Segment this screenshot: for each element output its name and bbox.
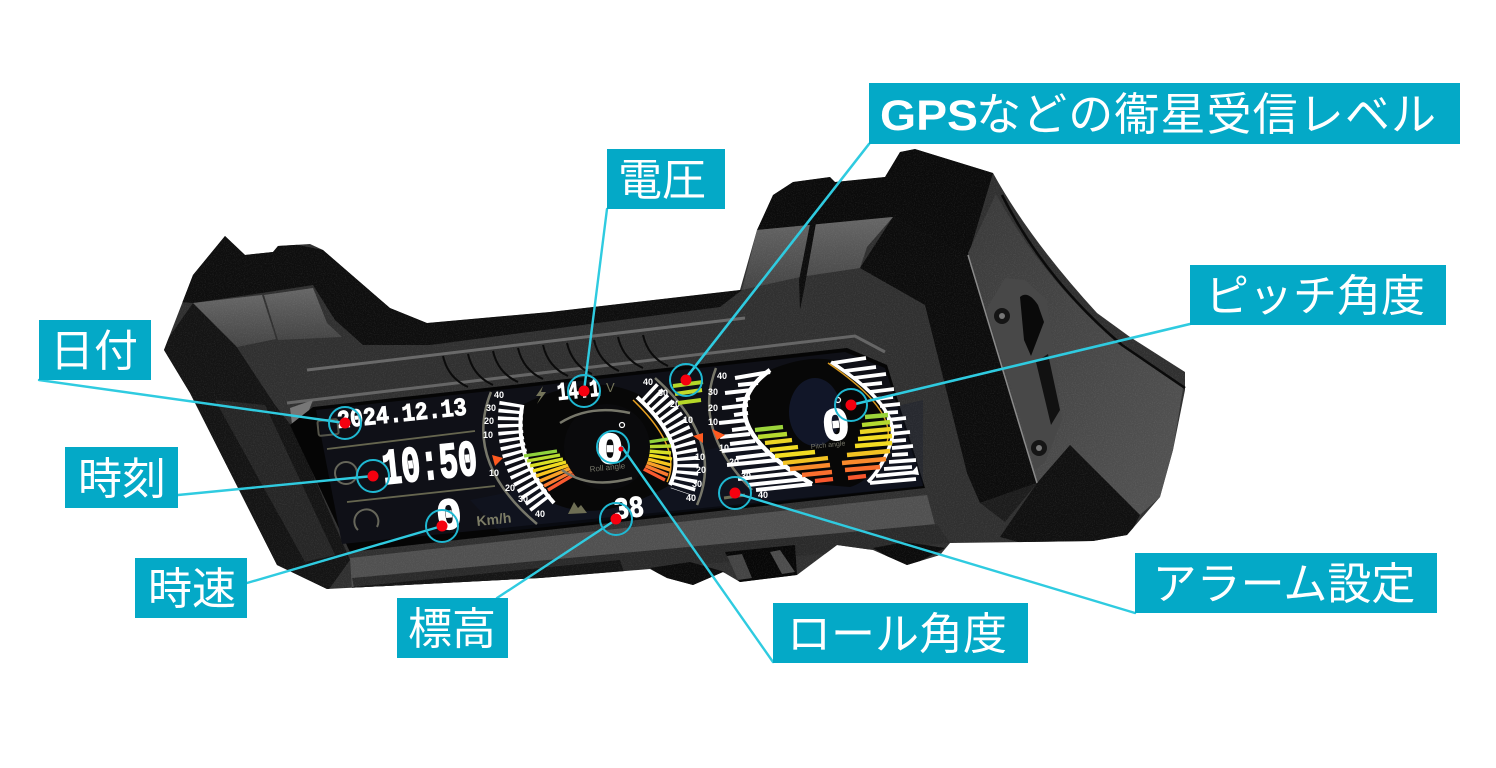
voltage readout: V xyxy=(606,380,615,395)
right scale numbers: 40 xyxy=(686,493,696,503)
left inner edge xyxy=(744,370,812,484)
speed: 0 xyxy=(434,492,464,544)
label: pitch angle: ピッチ角度 xyxy=(1205,272,1425,321)
voltage readout: 14.1 xyxy=(556,375,602,408)
left side face xyxy=(160,303,350,592)
marker: voltage xyxy=(568,375,600,407)
label: elevation xyxy=(397,598,508,658)
side panel xyxy=(968,194,1183,515)
left scale numbers xyxy=(708,371,768,500)
grain xyxy=(150,140,1200,600)
upper left grey panels xyxy=(193,295,276,347)
line: alarm xyxy=(735,493,1135,613)
ridge highlights xyxy=(307,318,745,370)
left scale numbers: 40 xyxy=(535,509,545,519)
chart: pitch gauge xyxy=(708,358,919,500)
roll value: 0 xyxy=(597,427,623,477)
chart: roll gauge xyxy=(483,377,706,524)
voltage readout xyxy=(536,375,615,408)
label: voltage xyxy=(607,149,725,209)
marker: elevation xyxy=(600,503,632,535)
marker: GPS xyxy=(670,364,702,396)
panel: date time speed xyxy=(317,394,512,544)
label: GPS satellite level: GPS xyxy=(880,92,978,140)
elevation readout xyxy=(568,492,646,529)
elevation readout: 38 xyxy=(612,492,646,529)
alarm markers xyxy=(492,455,503,466)
label: speed xyxy=(135,558,247,618)
label: alarm setting: アラーム設定 xyxy=(1153,560,1415,609)
left scale ticks xyxy=(719,372,812,490)
left scale numbers: 20 xyxy=(505,483,515,493)
centre dial xyxy=(564,404,650,490)
left scale numbers: 20 xyxy=(708,403,718,413)
line: GPS xyxy=(686,144,869,378)
GPS signal bars xyxy=(673,382,703,403)
top block black xyxy=(757,149,993,257)
left scale numbers xyxy=(483,390,545,519)
roll caption: Roll angle xyxy=(589,461,626,474)
left scale numbers: 40 xyxy=(758,490,768,500)
dial disc xyxy=(744,359,890,487)
bottom band xyxy=(350,495,937,590)
device body xyxy=(150,140,1200,600)
label: roll angle: ロール角度 xyxy=(787,610,1007,659)
label: speed: 時速 xyxy=(148,565,236,614)
right colour bars xyxy=(842,415,892,478)
outer olive arc xyxy=(709,368,752,490)
alarm markers xyxy=(712,429,725,440)
big black shoulder xyxy=(860,217,1037,503)
left scale numbers: 30 xyxy=(518,494,528,504)
left scale numbers: 10 xyxy=(483,430,493,440)
time: 10:50 xyxy=(380,433,480,500)
display screen xyxy=(290,348,925,552)
left colour bars xyxy=(755,427,833,481)
left scale numbers: 20 xyxy=(729,457,739,467)
left lip black xyxy=(182,236,742,345)
side lower block xyxy=(1000,445,1140,548)
left scale numbers: 10 xyxy=(708,417,718,427)
outer olive arcs xyxy=(483,392,537,524)
marker: alarm xyxy=(719,477,751,509)
icon: calendar xyxy=(317,419,339,436)
left tick scale xyxy=(510,403,542,505)
leader lines xyxy=(39,144,1190,662)
line: pitch xyxy=(851,324,1190,405)
line: speed xyxy=(247,526,442,583)
right inner edge xyxy=(831,362,893,482)
line: time xyxy=(178,476,373,495)
right scale numbers: 10 xyxy=(695,452,705,462)
label: voltage: 電圧 xyxy=(618,156,706,205)
line: date xyxy=(39,380,345,423)
label: GPS satellite level xyxy=(869,83,1460,144)
label: GPS satellite level: などの衞星受信レベル xyxy=(976,89,1436,140)
right scale numbers: 30 xyxy=(658,388,668,398)
right scale numbers xyxy=(643,377,706,503)
left scale numbers: 30 xyxy=(741,471,751,481)
right scale ticks xyxy=(833,358,918,483)
target markers xyxy=(329,364,867,542)
right colour fan xyxy=(636,439,672,480)
alarm icon xyxy=(724,495,745,498)
speed unit: Km/h xyxy=(476,509,512,529)
icon: clock xyxy=(335,462,357,484)
left scale numbers: 10 xyxy=(719,443,729,453)
marker: pitch xyxy=(835,389,867,421)
left scale numbers: 10 xyxy=(489,468,499,478)
icon: bolt xyxy=(536,386,546,404)
right scale numbers: 10 xyxy=(683,415,693,425)
right scale numbers: 20 xyxy=(696,465,706,475)
separator lines xyxy=(327,431,495,502)
left scale numbers: 20 xyxy=(484,416,494,426)
right scale numbers: 40 xyxy=(643,377,653,387)
left scale numbers: 30 xyxy=(486,403,496,413)
vent ribs xyxy=(443,335,668,387)
left colour fan xyxy=(524,451,575,490)
left grainy strip xyxy=(215,400,335,562)
upper right grey panel xyxy=(742,217,893,290)
label: time: 時刻 xyxy=(78,455,166,504)
right scale numbers: 30 xyxy=(692,479,702,489)
right scale numbers: 20 xyxy=(670,399,680,409)
marker: time xyxy=(357,460,389,492)
side port plate with latch and screws xyxy=(986,278,1062,470)
line: elevation xyxy=(497,519,617,598)
line: voltage xyxy=(584,209,607,391)
marker: roll xyxy=(597,431,629,463)
right tick scale xyxy=(648,392,687,492)
icon: speedometer xyxy=(354,509,378,530)
label: elevation: 標高 xyxy=(408,605,496,654)
knobs xyxy=(650,562,725,585)
black dial xyxy=(518,385,676,511)
label: time xyxy=(65,447,178,508)
pitch caption: Pitch angle xyxy=(810,440,846,451)
marker: date xyxy=(329,407,361,439)
icon: mountain xyxy=(568,502,587,514)
label: date xyxy=(39,320,151,380)
marker: speed xyxy=(426,510,458,542)
left scale numbers: 40 xyxy=(717,371,727,381)
label: date: 日付 xyxy=(50,327,138,376)
left scale numbers: 40 xyxy=(494,390,504,400)
date: 2024.12.13 xyxy=(336,394,468,436)
line: roll xyxy=(622,447,773,662)
pitch value: 0 xyxy=(820,400,852,455)
left scale numbers: 30 xyxy=(708,387,718,397)
